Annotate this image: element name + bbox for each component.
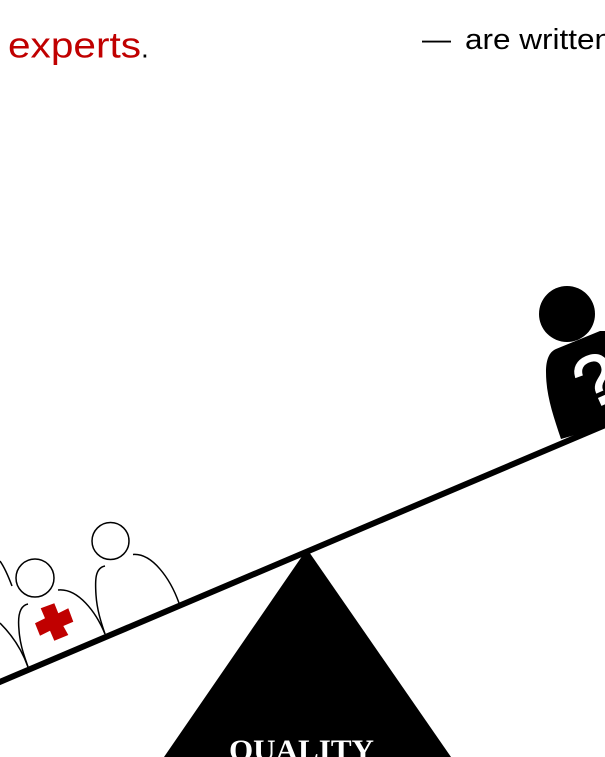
heading fragment: experts: experts: [8, 24, 141, 66]
figure: expert, partially cropped: [0, 561, 28, 667]
seesaw fulcrum triangle: [164, 549, 451, 757]
heading fragment: experts: .: [141, 32, 149, 64]
icon: red cross: [35, 603, 73, 641]
figure: expert: [92, 522, 179, 634]
figure: anonymous author with question mark: [539, 286, 605, 439]
figure: medical expert: [16, 559, 105, 667]
heading fragment: are written: —: [422, 24, 451, 56]
seesaw beam: [0, 423, 605, 684]
heading fragment: are written: are written: [465, 24, 605, 56]
